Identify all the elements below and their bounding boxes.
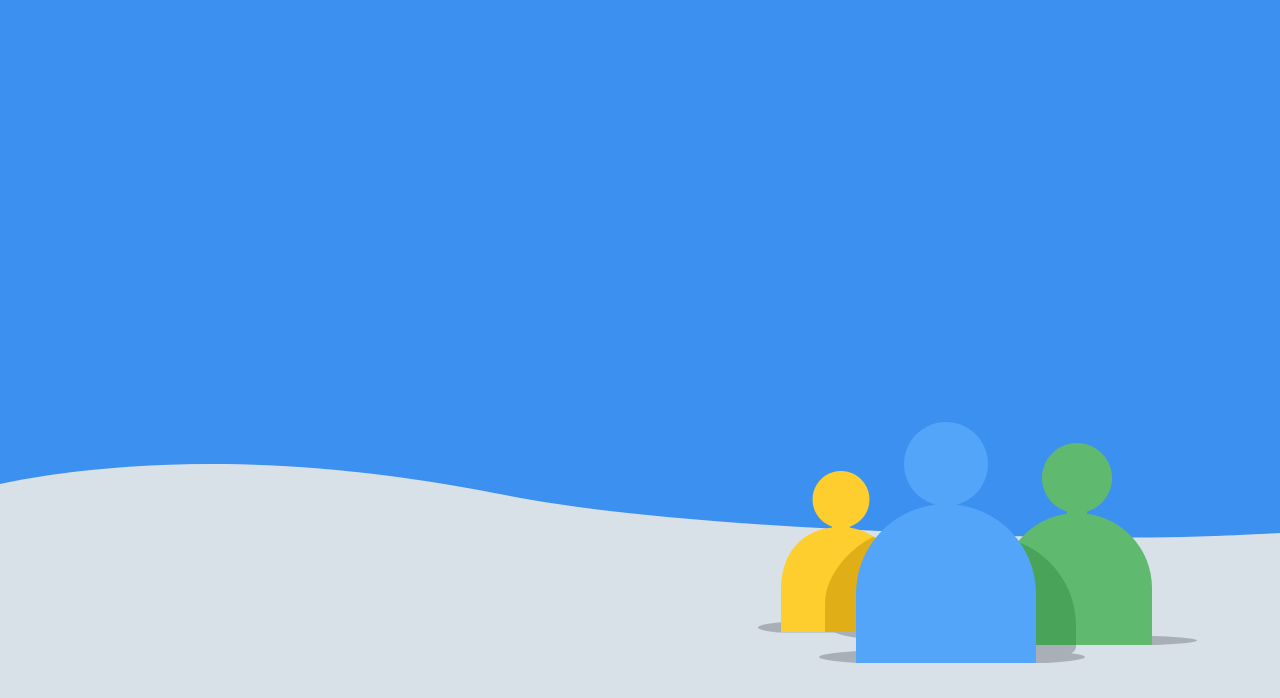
ground shadows (758, 621, 1197, 666)
figure: blue person in front (856, 422, 1036, 663)
figure: green person (1018, 443, 1152, 645)
background: pale grey hill (0, 464, 1280, 698)
figure: yellow person (781, 471, 876, 632)
illustration: three figures on a hillside (0, 422, 1280, 698)
